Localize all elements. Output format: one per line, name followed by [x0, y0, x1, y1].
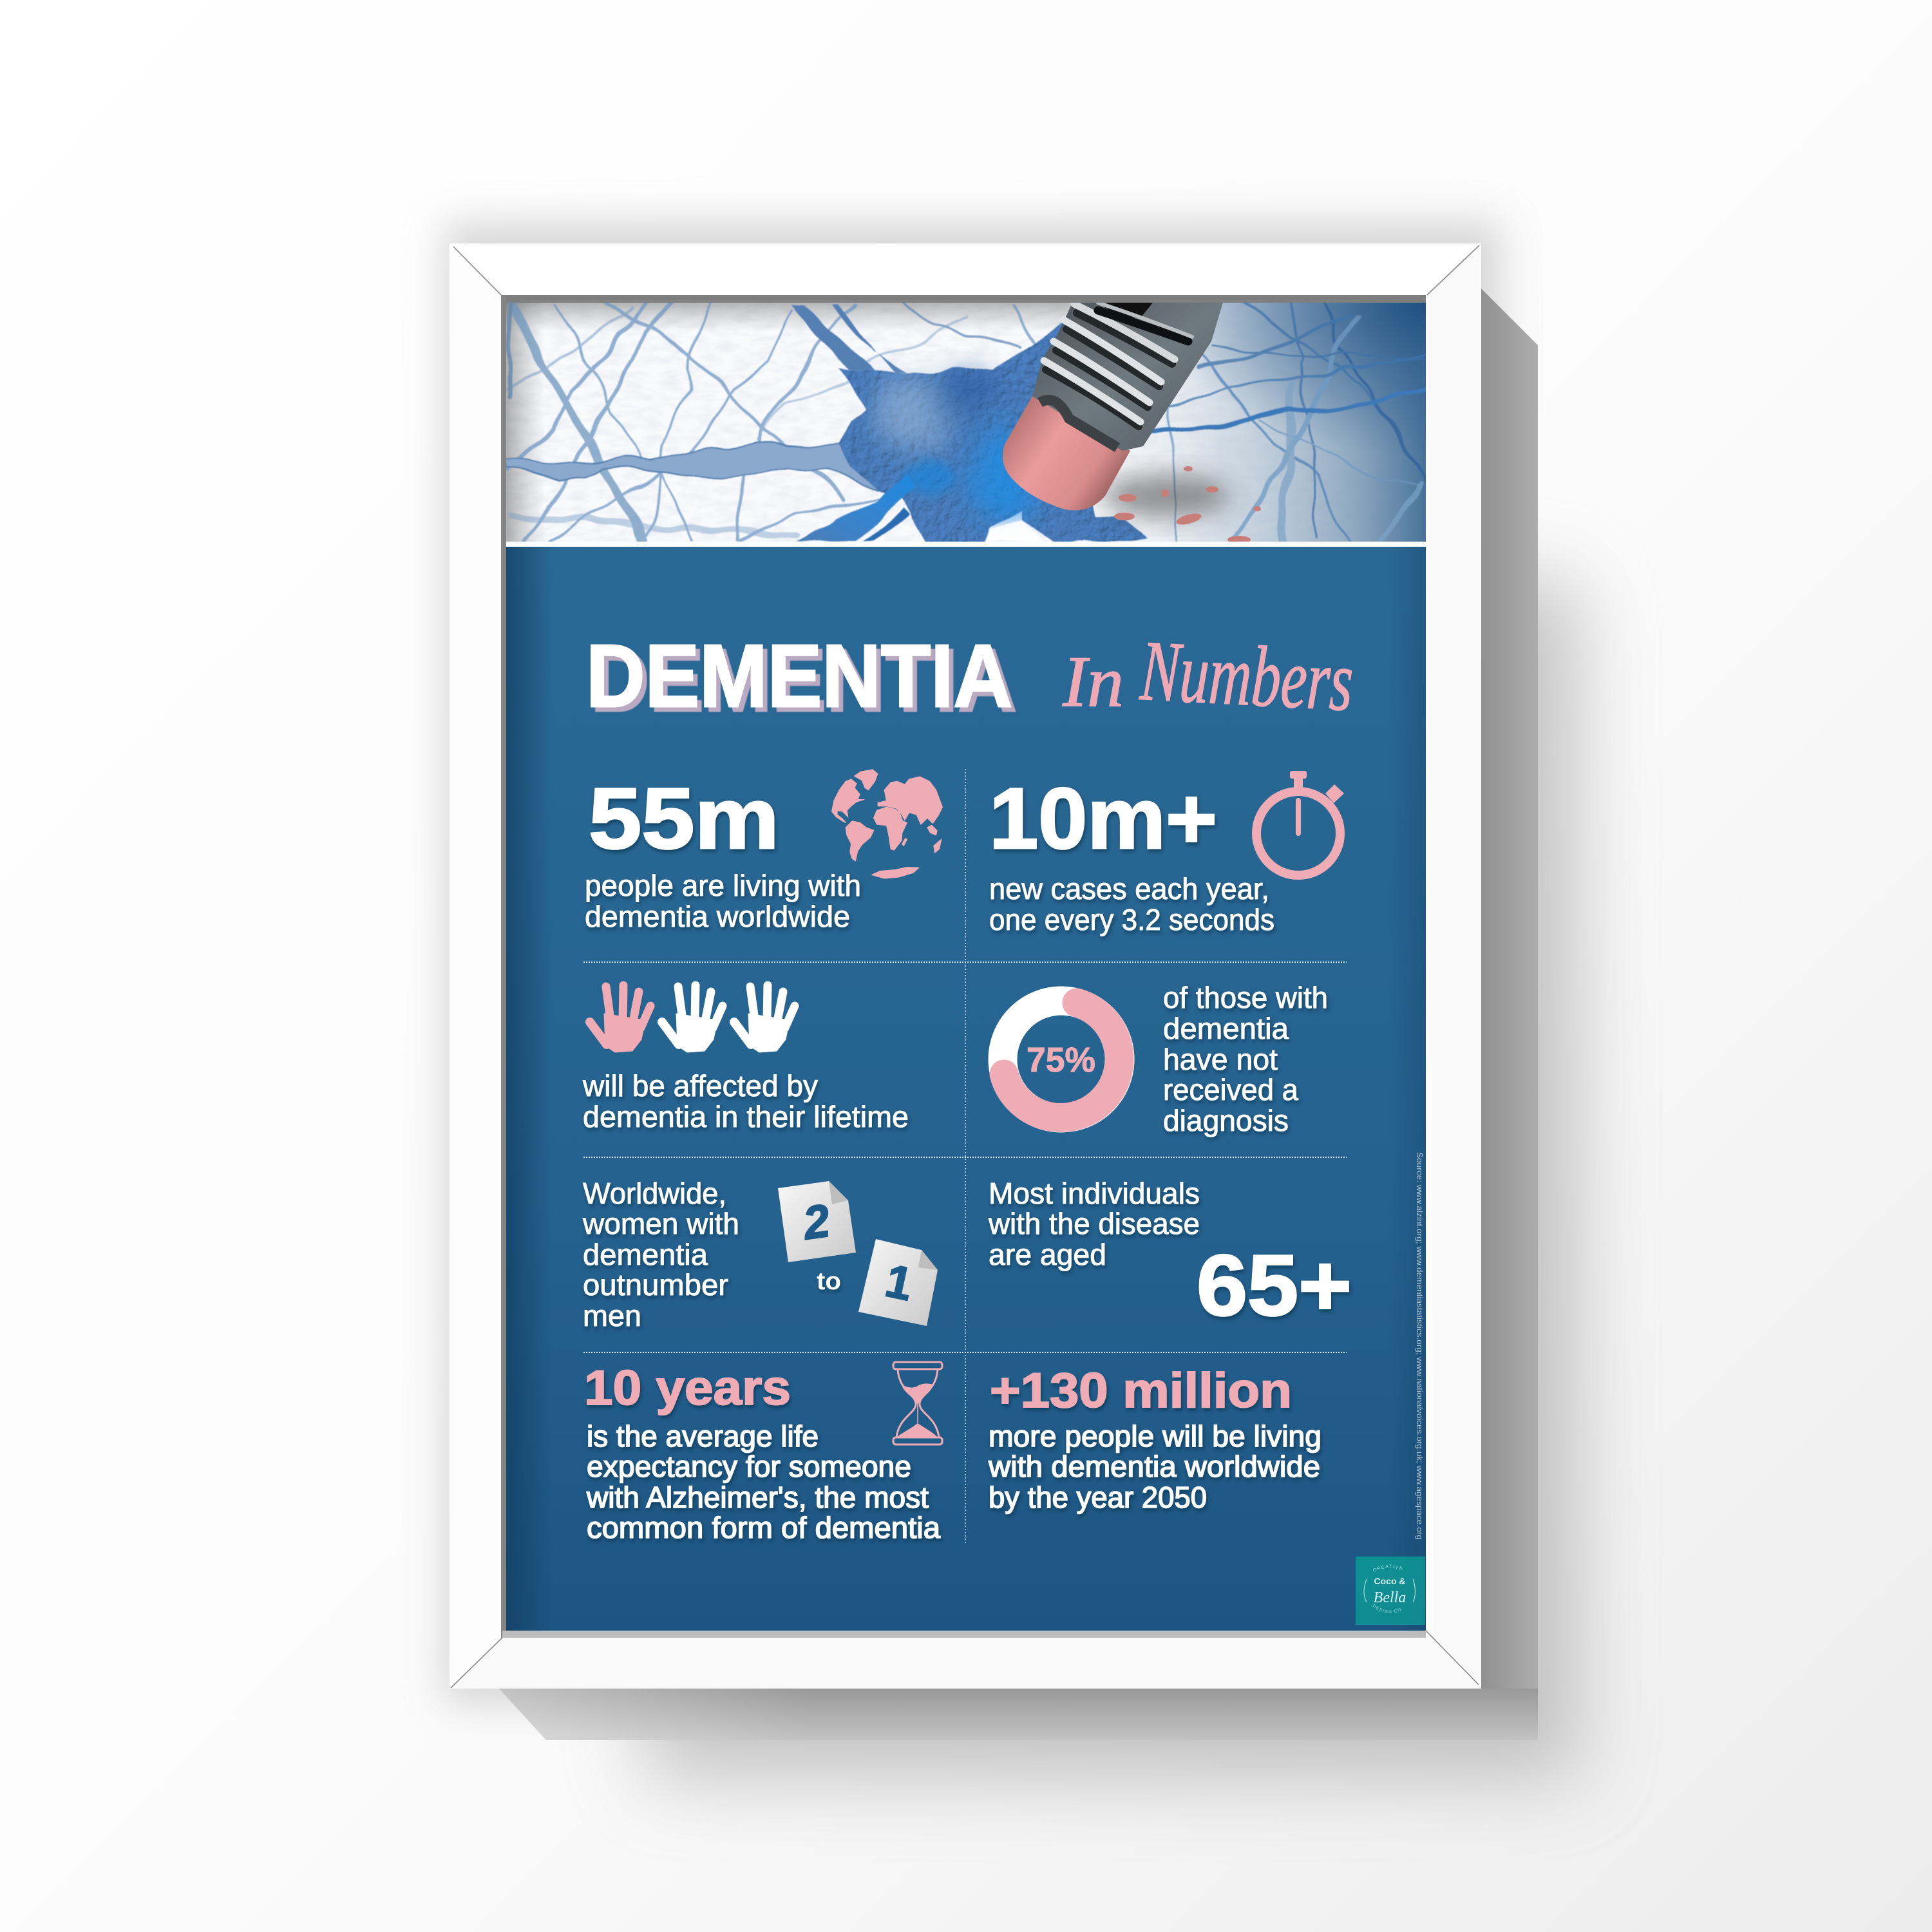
hero illustration: neuron being erased	[502, 303, 1427, 544]
frame cast shadow	[499, 286, 1538, 1740]
stat: 10 years	[584, 1361, 940, 1544]
neuron spikes	[791, 304, 907, 374]
label: to: to	[817, 1268, 841, 1295]
logo: Coco and Bella: DESIGN CO	[1373, 1604, 1401, 1613]
logo: Coco and Bella: CREATIVE	[1373, 1565, 1403, 1571]
stat: women outnumber men text: women with	[582, 1207, 739, 1240]
stat: 10m+: one every 3.2 seconds	[989, 903, 1274, 936]
eraser shadow	[1101, 475, 1230, 516]
stat: diagnosis text: diagnosis	[1163, 1104, 1289, 1137]
white stripe under image	[506, 542, 1426, 547]
stat: 55m	[585, 771, 861, 933]
stat: age 65+: 65+	[1197, 1238, 1352, 1334]
icon: paper 2: 2	[799, 1195, 833, 1250]
donut chart: 75%: 75%	[1027, 1041, 1095, 1079]
stat: +130 million: +130 million	[990, 1363, 1292, 1418]
icon: paper 2	[778, 1181, 856, 1262]
stat: 55m: people are living with	[585, 869, 861, 902]
neuron axon	[507, 440, 881, 489]
blue panel	[506, 547, 1426, 1631]
soft wall shadow	[444, 222, 1578, 1777]
poster frame	[450, 243, 1481, 1689]
stat: lifetime text: will be affected by	[582, 1069, 818, 1103]
stat: 10m+	[989, 771, 1274, 936]
icon: three hands	[590, 985, 795, 1052]
stat: 10 years: 10 years	[584, 1361, 791, 1416]
stat: diagnosis text: of those with	[1163, 981, 1328, 1014]
stat: age 65+: with the disease	[988, 1207, 1200, 1240]
donut chart: 75%	[1003, 1001, 1120, 1118]
pencil ferrule	[1032, 303, 1223, 451]
grid dividers	[583, 769, 1347, 1544]
stat: age 65+	[988, 1177, 1352, 1334]
logo: Coco and Bella: Coco &	[1374, 1576, 1405, 1586]
logo: Coco and Bella: Bella	[1374, 1589, 1406, 1606]
subtitle: In Numbers	[1062, 623, 1356, 729]
icon: globe	[832, 770, 942, 878]
stat: lifetime text: dementia in their lifetime	[583, 1100, 909, 1133]
stat: age 65+: are aged	[989, 1238, 1106, 1271]
stat: women outnumber men text: Worldwide,	[583, 1177, 726, 1210]
stat: +130 million: with dementia worldwide	[988, 1450, 1320, 1483]
subtitle: In Numbers: Numbers	[1138, 623, 1356, 729]
stat: 55m: 55m	[589, 771, 779, 867]
source credit: Source: www.alzint.org; www.dementiastatistics.org; www.nationalvoices.org.uk; www.agespace.org	[1415, 1152, 1425, 1540]
stat: 55m: dementia worldwide	[585, 900, 850, 933]
eraser crumbs	[1114, 466, 1261, 544]
stat: diagnosis text: received a	[1163, 1073, 1298, 1106]
stat: women outnumber men text: dementia	[583, 1238, 708, 1271]
eraser	[1003, 396, 1130, 510]
subtitle: In Numbers: In	[1062, 642, 1124, 722]
stat: lifetime text	[582, 1069, 909, 1133]
logo: Coco and Bella	[1356, 1557, 1425, 1625]
stat: 10 years: with Alzheimer's, the most	[586, 1481, 929, 1514]
stat: age 65+: Most individuals	[989, 1177, 1200, 1210]
stat: 10m+: 10m+	[989, 771, 1217, 867]
neuron lower branches	[798, 470, 1043, 542]
stat: diagnosis text	[1163, 981, 1328, 1137]
right nerve fibre	[1140, 388, 1427, 433]
stat: +130 million: more people will be living	[989, 1419, 1321, 1453]
icon: paper 1: 1	[881, 1255, 917, 1311]
stat: women outnumber men text: men	[583, 1299, 641, 1332]
stat: 10 years: expectancy for someone	[587, 1450, 911, 1483]
stat: 10m+: new cases each year,	[989, 872, 1269, 905]
stat: diagnosis text: have not	[1163, 1043, 1278, 1076]
neuron cell body	[837, 309, 1146, 542]
stat: women outnumber men text: outnumber	[583, 1268, 728, 1302]
stat: +130 million: by the year 2050	[989, 1481, 1207, 1514]
icon: hourglass	[893, 1362, 942, 1444]
title: DEMENTIA: DEMENTIA	[586, 627, 1012, 726]
stat: +130 million	[988, 1363, 1321, 1514]
icon: stopwatch	[1256, 771, 1344, 875]
stat: 10 years: common form of dementia	[587, 1511, 940, 1544]
stat: women outnumber men text	[582, 1177, 739, 1332]
stat: 10 years: is the average life	[587, 1419, 819, 1453]
icon: paper 1	[858, 1239, 938, 1326]
stat: diagnosis text: dementia	[1163, 1012, 1289, 1045]
